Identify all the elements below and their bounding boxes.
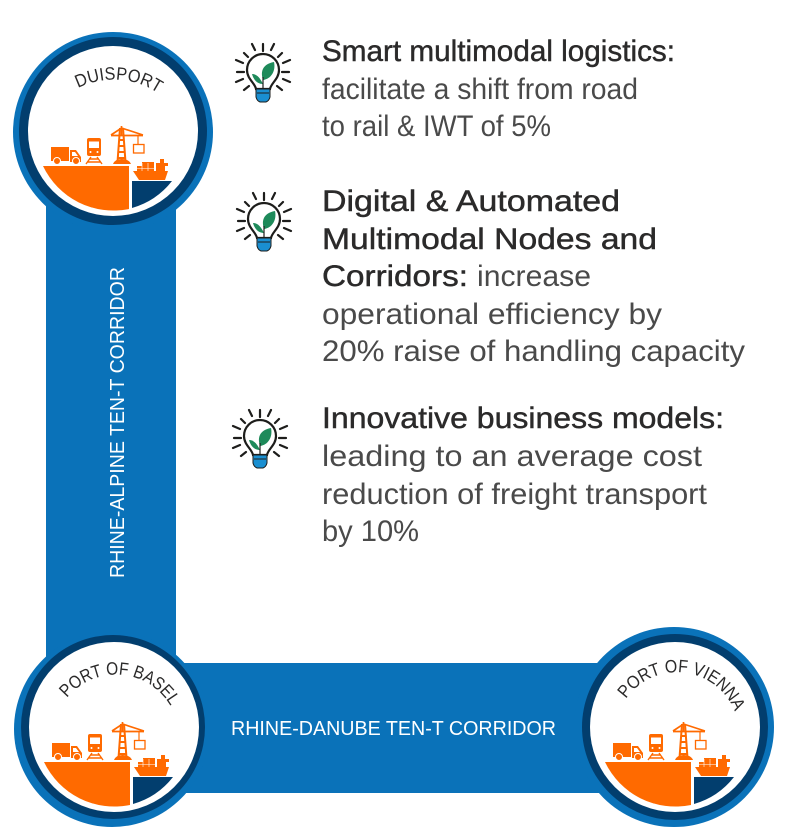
node: Port of Basel: [14, 635, 205, 827]
icon: lightbulb with leaves 1: [236, 44, 290, 102]
text block: innovative business models: Innovative business models:: [322, 402, 724, 435]
panel: rhine-danube corridor bar: [176, 663, 600, 793]
icon: lightbulb with leaves 2: [237, 193, 291, 251]
text block: smart multimodal logistics: to rail & IWT of 5%: [322, 110, 551, 143]
panel: rhine-alpine corridor bar: [46, 190, 176, 680]
text block: innovative business models: reduction of freight transport: [322, 478, 708, 511]
text block: innovative business models: [322, 402, 724, 548]
text block: digital and automated nodes: 20% raise of handling capacity: [322, 335, 745, 368]
text block: digital and automated nodes: Corridors:: [322, 260, 468, 293]
text block: digital and automated nodes: Digital & Automated: [322, 185, 620, 218]
text block: digital and automated nodes: [322, 185, 745, 368]
text block: smart multimodal logistics: Smart multimodal logistics:: [322, 35, 675, 68]
icon: lightbulb with leaves 3: [233, 410, 287, 468]
label: rhine-danube corridor: RHINE-DANUBE TEN-T CORRIDOR: [231, 718, 556, 740]
text block: smart multimodal logistics: facilitate a shift from road: [322, 73, 638, 106]
node: Port of Vienna: [582, 627, 774, 827]
label: Port of Vienna: PORT OF VIENNA: [617, 660, 744, 712]
text block: digital and automated nodes: operational efficiency by: [322, 298, 662, 331]
label: Duisport: DUISPORT: [74, 67, 164, 91]
node: Duisport: [13, 32, 213, 225]
label: Port of Basel: PORT OF BASEL: [58, 662, 178, 706]
text block: digital and automated nodes: Multimodal Nodes and: [322, 223, 657, 256]
text block: smart multimodal logistics: [322, 35, 675, 143]
label: rhine-alpine corridor: RHINE-ALPINE TEN-T CORRIDOR: [107, 267, 129, 578]
text block: innovative business models: leading to an average cost: [322, 440, 703, 473]
text block: digital and automated nodes: increase: [477, 260, 591, 293]
text block: innovative business models: by 10%: [322, 515, 419, 548]
